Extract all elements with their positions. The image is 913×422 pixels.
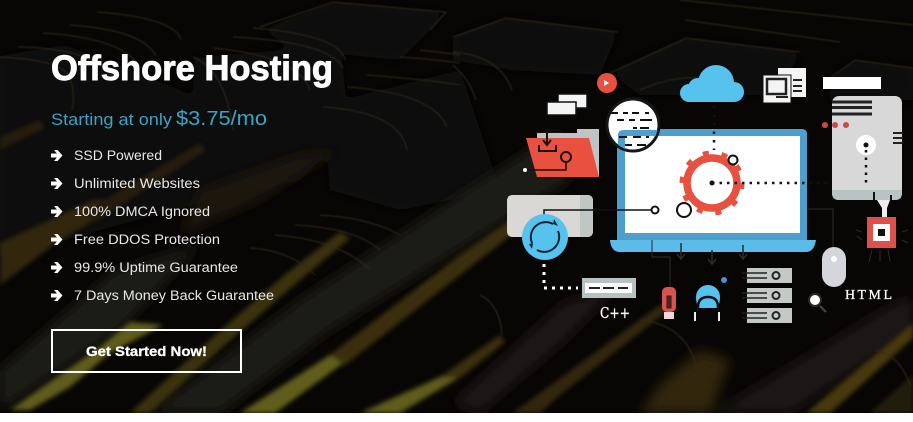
icon: drive with sync (507, 195, 658, 260)
icon: stacked windows (547, 94, 587, 115)
icon: server rack (742, 268, 792, 323)
subtitle: starting price: $3.75/mo (176, 108, 267, 130)
white node (808, 293, 826, 312)
blue dot (721, 277, 727, 283)
label: C++: C++ (600, 304, 630, 322)
icon: gear (682, 153, 742, 213)
icon: chip (856, 200, 908, 262)
dotted connector (544, 264, 578, 288)
feature: DDOS: Free DDOS Protection (74, 232, 220, 247)
icon: magnifier circle (606, 98, 660, 152)
feature: DMCA: 100% DMCA Ignored (74, 204, 210, 219)
white label bar (823, 77, 881, 89)
button: get started (52, 330, 241, 372)
label: HTML: HTML (845, 288, 892, 303)
feature: websites: Unlimited Websites (74, 176, 200, 191)
feature: money back: 7 Days Money Back Guarantee (74, 288, 274, 303)
feature: uptime: 99.9% Uptime Guarantee (74, 260, 238, 275)
icon: cloud (680, 65, 744, 102)
feature list (51, 148, 274, 303)
icon: server tower (832, 96, 903, 200)
button: get started: Get Started Now! (86, 344, 207, 359)
icon: person with headset (695, 285, 720, 321)
icon: code block (582, 278, 636, 298)
subtitle: starting price (51, 108, 267, 130)
subtitle: starting price: Starting at only (51, 110, 173, 129)
icon: mouse (808, 209, 846, 287)
icon: arrows under laptop (677, 243, 747, 264)
feature: SSD: SSD Powered (74, 148, 162, 163)
icon: play badge (597, 73, 617, 93)
status dots (822, 122, 849, 128)
connector bodies (0, 2, 913, 260)
laptop (610, 106, 866, 252)
illustration: technology cluster (507, 65, 908, 323)
icon: browser windows (763, 68, 806, 103)
icon: USB stick (652, 240, 676, 319)
icon: folder with download (523, 129, 599, 177)
title: Offshore Hosting (51, 49, 333, 88)
cables and stripes (0, 130, 913, 413)
